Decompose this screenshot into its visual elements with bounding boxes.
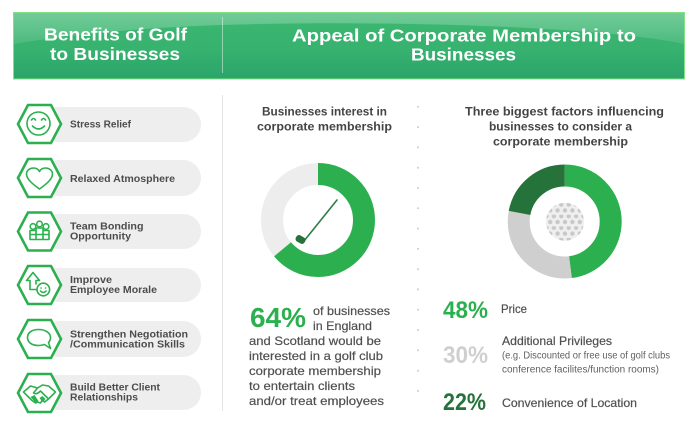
icon: handshake	[18, 374, 61, 412]
benefit: stress relief	[18, 105, 201, 143]
heading: appeal of corporate membership: Appeal of Corporate Membership to	[292, 26, 636, 46]
stat: additional privileges: Additional Privileges	[502, 334, 612, 348]
callout: 64 percent: of businesses	[313, 304, 390, 318]
callout: 64 percent: and Scotland would be	[249, 334, 381, 348]
heading: factors: corporate membership	[493, 134, 628, 148]
heading: appeal of corporate membership	[292, 26, 636, 64]
stat: additional privileges: conference facilites/function rooms)	[502, 364, 659, 376]
stat: convenience of location: 22%	[443, 389, 486, 416]
callout: 64 percent: corporate membership	[249, 364, 381, 378]
dotted divider	[417, 107, 419, 411]
callout: 64 percent: in England	[313, 319, 372, 333]
stat: additional privileges: (e.g. Discounted or free use of golf clubs	[502, 350, 670, 362]
heading: interest: Businesses interest in	[262, 104, 387, 118]
heading: interest	[257, 104, 392, 134]
panel: three biggest factors	[443, 104, 670, 416]
benefit: team bonding: Opportunity	[70, 232, 131, 242]
icon: arrow and smiley	[18, 266, 61, 304]
stat: additional privileges: 30%	[443, 342, 488, 369]
benefit: improve employee morale: Improve	[70, 275, 112, 286]
icon: heart	[18, 159, 61, 197]
benefit: relaxed atmosphere	[18, 159, 201, 197]
stat: price: 48%	[443, 297, 488, 324]
benefit: negotiation and communication: Strengthen Negotiation	[70, 330, 188, 340]
panel: business interest	[249, 104, 392, 408]
icon: golf ball	[546, 203, 584, 241]
callout: 64 percent: 64%	[250, 302, 306, 333]
icon: team	[18, 212, 61, 250]
benefit: improve employee morale: Employee Morale	[70, 285, 157, 296]
heading: factors: businesses to consider a	[489, 120, 632, 134]
stat: additional privileges	[443, 334, 670, 376]
heading: benefits of golf: Benefits of Golf	[44, 24, 187, 44]
benefit: team bonding	[18, 212, 201, 250]
benefit: team bonding: Team Bonding	[70, 222, 144, 232]
stat: price	[443, 297, 527, 324]
stat: price: Price	[501, 302, 527, 316]
callout: 64 percent: and/or treat employees	[249, 394, 384, 408]
icon: golf club	[294, 200, 337, 245]
column divider	[222, 95, 224, 411]
icon: speech bubble	[18, 320, 61, 358]
callout: 64 percent: to entertain clients	[249, 379, 355, 393]
benefit: relaxed atmosphere: Relaxed Atmosphere	[70, 174, 175, 185]
heading: factors	[465, 104, 664, 148]
benefit: stress relief: Stress Relief	[70, 120, 132, 130]
heading: interest: corporate membership	[257, 120, 392, 134]
heading: appeal of corporate membership: Businesses	[411, 44, 516, 64]
callout: 64 percent: interested in a golf club	[249, 349, 383, 363]
heading: benefits of golf	[44, 24, 187, 64]
donut chart: 64 percent	[272, 174, 364, 266]
stat: convenience of location	[443, 389, 637, 416]
icon: smiley	[18, 105, 61, 143]
heading: factors: Three biggest factors influencing	[465, 104, 664, 118]
panel: benefits list	[18, 105, 201, 412]
benefit: client relationships	[18, 374, 201, 412]
benefit: improve employee morale	[18, 266, 201, 304]
header banner	[14, 12, 684, 79]
benefit: negotiation and communication	[18, 320, 201, 358]
benefit: client relationships: Build Better Client	[70, 382, 161, 394]
stat: convenience of location: Convenience of Location	[502, 396, 637, 410]
heading: benefits of golf: to Businesses	[50, 44, 180, 64]
benefit: negotiation and communication: /Communication Skills	[70, 340, 185, 350]
benefit: client relationships: Relationships	[70, 392, 138, 404]
donut chart: factors	[519, 176, 611, 268]
callout: 64 percent	[249, 302, 390, 408]
